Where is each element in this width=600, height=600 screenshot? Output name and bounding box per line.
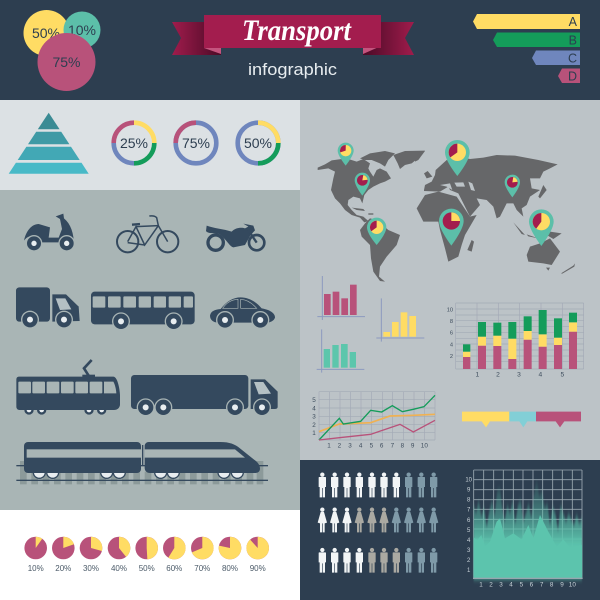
line chart: 10: [421, 443, 428, 450]
area chart: 4: [509, 582, 513, 589]
map: Europe, Asia, Africa, Australia: [415, 151, 575, 274]
area chart: 3: [467, 548, 471, 554]
icon: tram: [16, 360, 120, 415]
title ribbon: [172, 14, 414, 55]
line chart: 4: [312, 405, 316, 412]
line chart: 6: [380, 443, 384, 450]
panel: header background: [0, 0, 600, 100]
map: Americas: [318, 151, 425, 282]
icon: pyramid: [9, 113, 89, 174]
pie: 60%: 60%: [166, 564, 182, 573]
line chart: 5: [312, 397, 316, 404]
bubble chart: [24, 10, 100, 91]
pie: 50%: [135, 537, 158, 573]
legend bars: B: [569, 34, 577, 48]
area chart: [465, 470, 583, 589]
icon: delivery truck: [16, 287, 80, 329]
bar chart: pink: [317, 276, 365, 320]
area chart: 8: [550, 582, 554, 589]
area chart: 6: [467, 518, 471, 524]
bar chart: teal: [317, 329, 364, 373]
pie: 40%: [108, 537, 130, 573]
pin: USA: [355, 173, 370, 196]
line chart: 8: [401, 443, 405, 450]
donut: 25%: 25%: [120, 135, 148, 151]
icon: bicycle: [117, 216, 178, 252]
area chart: 1: [479, 582, 483, 589]
pin: South America: [367, 218, 386, 245]
area chart: 2: [489, 582, 493, 589]
line chart: 3: [312, 414, 316, 421]
stacked bar chart: 2: [450, 354, 453, 360]
bottom right panel contents: [318, 470, 583, 589]
icon: car: [210, 297, 275, 329]
pie: 40%: 40%: [111, 564, 127, 573]
bubble chart: 75%: [52, 54, 81, 70]
line chart: 4: [359, 443, 363, 450]
area chart: 3: [499, 582, 503, 589]
legend bars: [473, 14, 580, 84]
pin: Europe: [445, 140, 470, 176]
pictogram: women row: [318, 507, 438, 532]
line chart: [312, 392, 435, 450]
stacked bar chart: 2: [496, 372, 500, 379]
stacked bar chart: 1: [475, 372, 479, 379]
area chart: 7: [467, 508, 471, 514]
donut: 50%: [238, 123, 278, 163]
pie: 90%: 90%: [250, 564, 266, 573]
panel: map and charts background: [300, 100, 600, 460]
icon: lorry: [131, 375, 278, 416]
line chart: 1: [312, 430, 316, 437]
bubble chart: 10%: [68, 22, 96, 38]
legend bars: A: [569, 15, 578, 29]
panel: vehicles background: [0, 190, 300, 510]
line chart: 2: [312, 422, 316, 429]
stacked bar chart: 6: [450, 331, 453, 337]
icon: high speed train: [24, 442, 260, 479]
donut: 75%: 75%: [182, 135, 210, 151]
vehicles row 1 and 2: [16, 214, 275, 330]
line chart: 9: [411, 443, 415, 450]
pie: 80%: [219, 537, 241, 573]
pie: 60%: [163, 537, 186, 573]
area chart: 10: [465, 478, 473, 484]
stacked bar chart: 10: [447, 307, 453, 313]
legend bars: D: [568, 70, 577, 84]
title ribbon: Transport: [242, 14, 352, 47]
area chart: 5: [467, 528, 471, 534]
icon: railway track: [16, 461, 268, 484]
panel: percentage pies background: [0, 510, 300, 600]
icon: bus: [91, 292, 195, 330]
pie: 80%: 80%: [222, 564, 238, 573]
line chart: 3: [348, 443, 352, 450]
pictogram: men row 1: [319, 472, 437, 497]
line chart: 2: [338, 443, 342, 450]
donut: 50%: 50%: [244, 135, 272, 151]
donut: 75%: [176, 123, 216, 163]
line chart: 7: [391, 443, 395, 450]
area chart: 8: [467, 498, 471, 504]
stacked bar chart: [447, 303, 584, 379]
area chart: 5: [520, 582, 524, 589]
area chart: 9: [560, 582, 564, 589]
stacked bar chart: 4: [450, 342, 453, 348]
icon: motorbike: [206, 224, 264, 250]
percentage pies: [24, 537, 269, 573]
donut: 25%: [114, 123, 154, 163]
vehicles row 3 and 4: [16, 360, 278, 484]
callout bar: [462, 412, 581, 427]
stacked bar chart: 4: [538, 372, 542, 379]
pie: 70%: 70%: [194, 564, 210, 573]
area chart: 6: [530, 582, 534, 589]
area chart: 2: [467, 558, 471, 564]
panel: people and area chart background: [300, 460, 600, 600]
pie: 20%: [52, 537, 75, 573]
pie: 70%: [191, 537, 214, 573]
pie: 30%: [80, 537, 102, 573]
pin: Indonesia: [529, 209, 554, 246]
pie: 10%: [24, 537, 47, 573]
subtitle: infographic: [248, 60, 338, 79]
area chart: 4: [467, 538, 471, 544]
map pins: [338, 140, 554, 246]
area chart: 10: [569, 582, 576, 589]
area chart: 1: [467, 568, 471, 574]
pie: 50%: 50%: [139, 564, 155, 573]
pictogram: men row 3: [319, 548, 437, 573]
stacked bar chart: 3: [517, 372, 521, 379]
pie: 90%: [246, 537, 269, 573]
pin: Africa: [439, 209, 464, 246]
stacked bar chart: 5: [560, 372, 564, 379]
line chart: 1: [327, 443, 331, 450]
legend bars: C: [568, 52, 577, 66]
pie: 30%: 30%: [83, 564, 99, 573]
area chart: 7: [540, 582, 544, 589]
pin: Asia: [505, 175, 520, 197]
line chart: 5: [370, 443, 374, 450]
charts region: [312, 276, 584, 450]
pie: 10%: 10%: [28, 564, 44, 573]
pie: 20%: 20%: [55, 564, 71, 573]
pin: north Canada: [338, 143, 354, 166]
icon: scooter: [24, 214, 75, 252]
bubble chart: 50%: [32, 25, 60, 41]
stacked bar chart: 8: [450, 319, 453, 325]
bar chart: yellow: [376, 298, 424, 342]
panel: pyramid and donuts background: [0, 100, 300, 190]
area chart: 9: [467, 488, 471, 494]
